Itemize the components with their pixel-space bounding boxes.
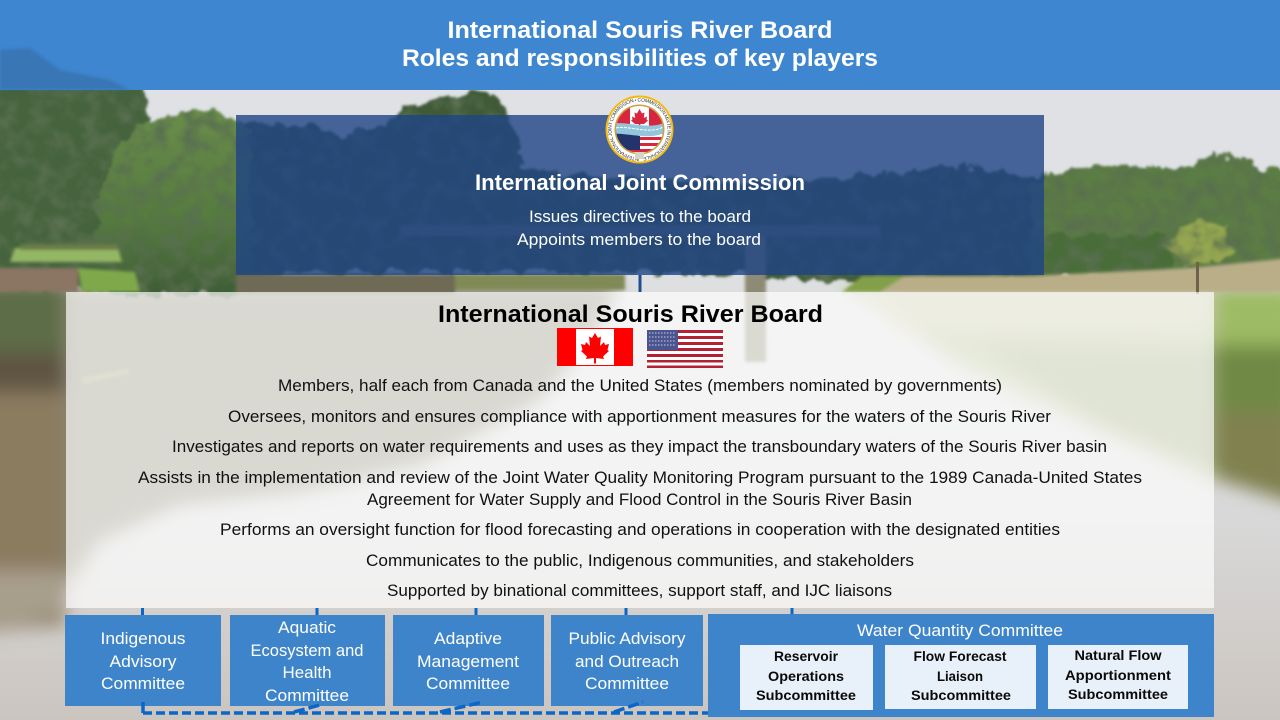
text: board responsibilities: Supported by binational committees, support staff, and IJC liaisons <box>387 581 892 600</box>
subcommittee: Reservoir Operations: Subcommittee <box>756 688 857 703</box>
text: commission duties: Issues directives to the board <box>529 207 751 226</box>
committee: Water Quantity: Water Quantity Committee <box>857 621 1063 640</box>
panel: International Souris River Board <box>66 292 1214 608</box>
icon: Canadian flag <box>557 328 633 366</box>
title: Roles and responsibilities of key players <box>402 45 878 72</box>
text: board responsibilities: Oversees, monitors and ensures compliance with apportionment measures for the waters of the Souris River <box>228 407 1051 426</box>
committee: Public Advisory and Outreach: Committee <box>585 674 669 693</box>
heading: International Joint Commission: International Joint Commission <box>475 170 805 195</box>
committee: Adaptive Management: Adaptive <box>434 629 502 648</box>
connectors: board to committees <box>142 608 792 620</box>
icon: IJC seal: INTERNATIONAL JOINT COMMISSION • COMMISSION MIXTE INTERNATIONALE <box>608 98 671 161</box>
committee: Adaptive Management: Committee <box>426 674 510 693</box>
committee: Indigenous Advisory: Advisory <box>110 652 177 671</box>
subcommittee: Reservoir Operations: Reservoir <box>774 649 839 664</box>
far shore <box>80 225 1280 384</box>
subcommittee: Reservoir Operations: Operations <box>768 669 844 684</box>
river banks and reflections <box>0 280 1280 632</box>
subcommittee: Reservoir Operations <box>740 645 873 710</box>
committee: Aquatic Ecosystem and Health <box>230 615 385 706</box>
text: board responsibilities: Investigates and reports on water requirements and uses as they impact the transboundary waters of the Souris River basin <box>172 437 1107 456</box>
committee: Adaptive Management <box>393 615 544 706</box>
icon: United States flag <box>647 330 723 368</box>
committee: Indigenous Advisory <box>65 615 221 706</box>
text: board responsibilities: Members, half each from Canada and the United States (members nominated by governments) <box>278 376 1002 395</box>
text: board responsibilities: Assists in the implementation and review of the Joint Water Quality Monitoring Program pursuant to the 1989 Canada-United States <box>138 468 1142 487</box>
text: commission duties <box>517 207 761 249</box>
subcommittee: Natural Flow Apportionment: Natural Flow <box>1074 648 1162 663</box>
title: International Souris River Board <box>448 17 832 44</box>
text: board responsibilities <box>138 376 1142 600</box>
subcommittee: Flow Forecast Liaison: Liaison <box>937 669 983 684</box>
subcommittee: Flow Forecast Liaison <box>885 645 1036 709</box>
heading: International Souris River Board: International Souris River Board <box>438 301 823 328</box>
committee: Public Advisory and Outreach <box>551 615 703 706</box>
text: board responsibilities: Communicates to the public, Indigenous communities, and stakeholders <box>366 551 914 570</box>
subcommittee: Flow Forecast Liaison: Flow Forecast <box>914 649 1007 664</box>
committee: Aquatic Ecosystem and Health: Ecosystem and <box>250 641 364 660</box>
subcommittee: Flow Forecast Liaison: Subcommittee <box>911 688 1012 703</box>
dashed connector: committee liaison <box>143 702 708 713</box>
trees <box>0 85 1280 295</box>
title <box>402 17 878 72</box>
committee: Indigenous Advisory: Committee <box>101 674 185 693</box>
subcommittee: Natural Flow Apportionment <box>1048 645 1188 709</box>
lawn and wall <box>0 244 140 292</box>
committee: Water Quantity <box>708 614 1214 717</box>
committee: Adaptive Management: Management <box>417 652 519 671</box>
text: board responsibilities: Agreement for Water Supply and Flood Control in the Souris River Basin <box>367 490 912 509</box>
text: commission duties: Appoints members to the board <box>517 230 761 249</box>
committee: Public Advisory and Outreach: Public Advisory <box>568 629 686 648</box>
header band <box>0 0 1280 90</box>
subcommittee: Natural Flow Apportionment: Subcommittee <box>1068 687 1169 702</box>
panel: International Joint Commission <box>236 115 1044 275</box>
connector: commission to board <box>638 275 642 292</box>
committee: Public Advisory and Outreach: and Outreach <box>575 652 679 671</box>
subcommittee: Natural Flow Apportionment: Apportionment <box>1065 668 1172 683</box>
committee: Aquatic Ecosystem and Health: Health <box>282 663 332 682</box>
committee: Aquatic Ecosystem and Health: Aquatic <box>278 618 337 637</box>
text: board responsibilities: Performs an oversight function for flood forecasting and operations in cooperation with the designated entities <box>220 520 1060 539</box>
committee: Aquatic Ecosystem and Health: Committee <box>265 686 349 705</box>
committee: Indigenous Advisory: Indigenous <box>100 629 186 648</box>
